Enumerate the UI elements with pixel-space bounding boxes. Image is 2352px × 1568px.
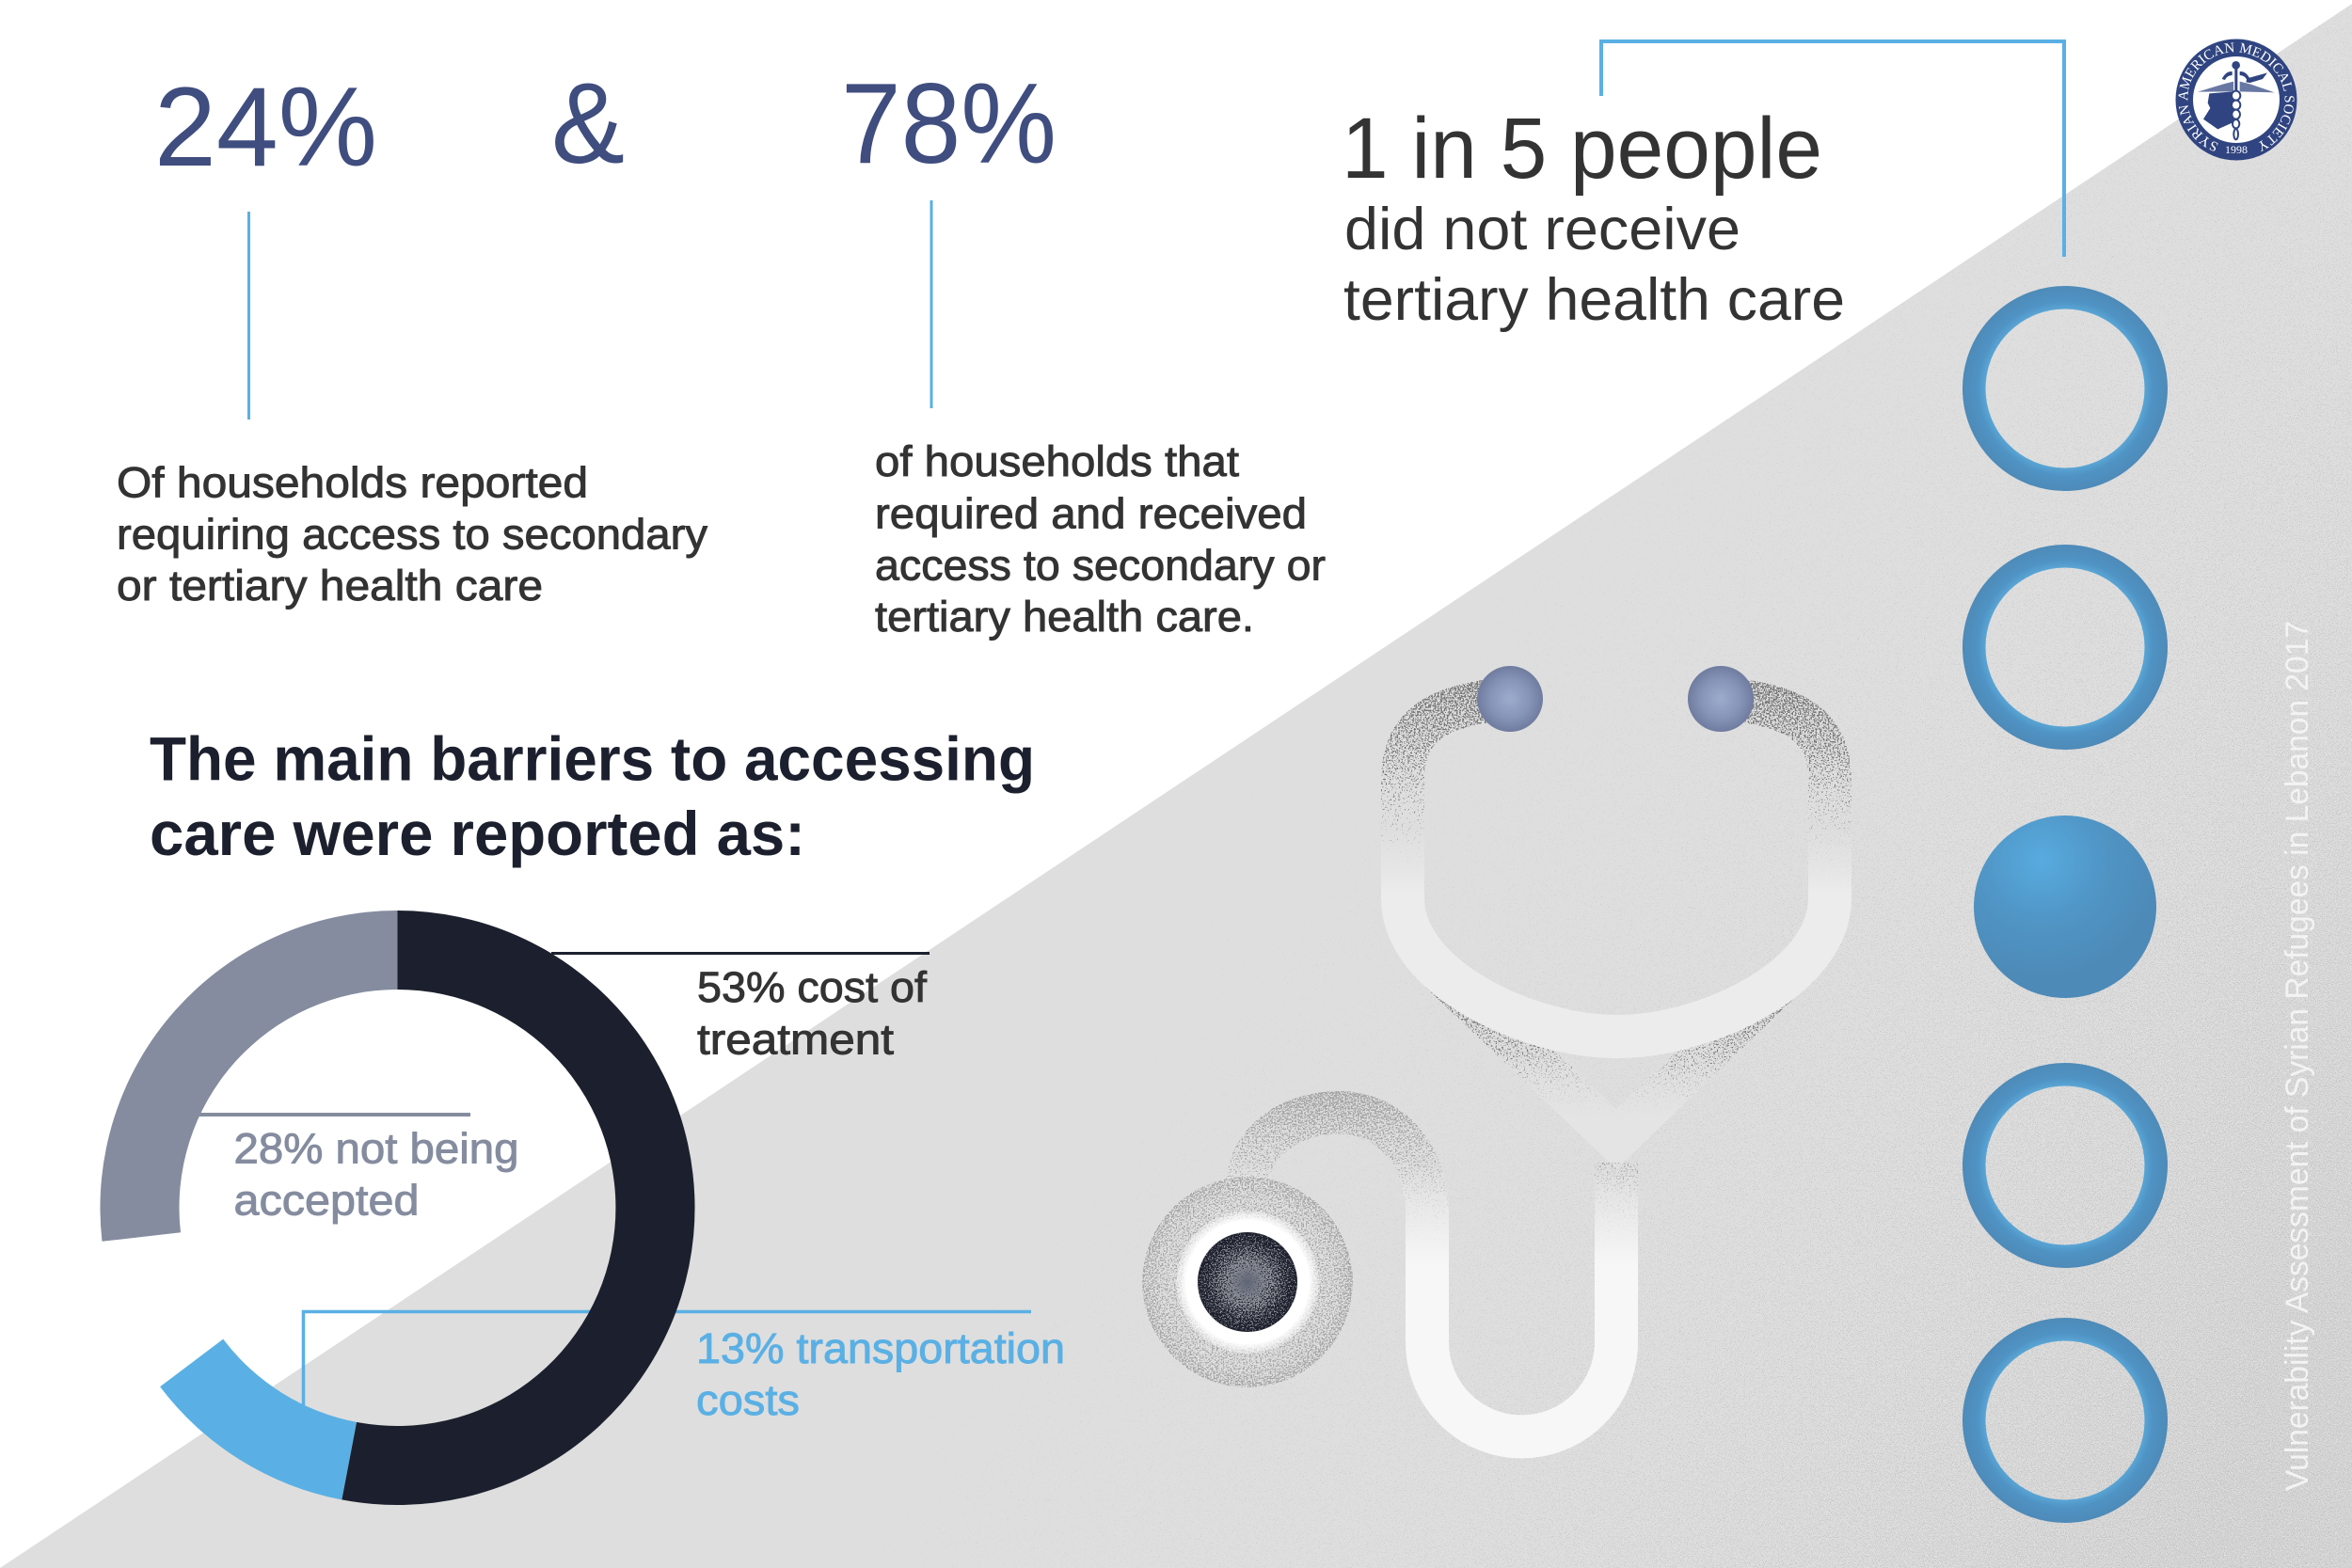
heading: main barriers — [150, 724, 1035, 868]
connector line under 78% — [930, 200, 933, 408]
main tube to chestpiece — [1248, 1113, 1616, 1436]
text block: 1 in 5 people — [1342, 101, 1845, 333]
ring 5 — [1974, 1329, 2156, 1512]
text block: 78% description: required and received — [875, 489, 1307, 538]
text block: 78% description: access to secondary or — [875, 542, 1326, 589]
text block: 78% description: of households that — [875, 437, 1240, 485]
text block: 1 in 5 people: tertiary health care — [1343, 267, 1845, 333]
text block: 24% description: requiring access to secondary — [117, 510, 708, 559]
ampersand: & — [551, 59, 625, 187]
label: 13% transportation costs: 13% transportation — [696, 1324, 1065, 1372]
label: 53% cost of treatment — [697, 963, 928, 1063]
heading: main barriers: care were reported as: — [150, 799, 805, 868]
stat: 24%: 24% — [154, 64, 377, 190]
donut chart — [100, 911, 695, 1505]
text block: 24% description — [117, 459, 708, 610]
label: 53% cost of treatment: 53% cost of — [697, 963, 928, 1011]
right earpiece — [1688, 666, 1754, 732]
text block: 24% description: or tertiary health care — [117, 562, 543, 610]
label: 13% transportation costs — [696, 1324, 1065, 1424]
filled circle — [1974, 816, 2156, 998]
left earpiece — [1477, 666, 1543, 732]
source note, vertical: Vulnerability Assessment of Syrian Refugees in Lebanon 2017 — [2280, 621, 2315, 1491]
label: 28% not being accepted — [233, 1125, 519, 1225]
Y branch of stethoscope — [1440, 972, 1782, 1139]
bracket connecting 1 in 5 text to circles — [1601, 41, 2064, 257]
ring 1 — [1974, 297, 2156, 480]
chestpiece — [1142, 1177, 1353, 1387]
leader line: 53% cost — [551, 952, 930, 955]
text block: 78% description — [875, 437, 1326, 641]
logo: Syrian American Medical Society seal: 1998 — [2225, 143, 2248, 156]
label: 53% cost of treatment: treatment — [697, 1016, 895, 1063]
stat: 78%: 78% — [841, 59, 1057, 187]
connector line under 24% — [247, 212, 250, 420]
icon: stethoscope — [1142, 666, 1830, 1436]
leader line: 28% not accepted — [199, 1113, 470, 1117]
text block: 78% description: tertiary health care. — [875, 593, 1254, 641]
ring 2 — [1974, 556, 2156, 738]
text block: 1 in 5 people: did not receive — [1344, 197, 1740, 262]
label: 13% transportation costs: costs — [696, 1376, 800, 1424]
label: 28% not being accepted: 28% not being — [233, 1125, 519, 1172]
leader line: 13% transportation — [303, 1311, 1031, 1408]
logo: Syrian American Medical Society seal: SYRIAN AMERICAN MEDICAL SOCIETY — [2179, 42, 2294, 152]
ring 4 — [1974, 1074, 2156, 1257]
heading: main barriers: The main barriers to accessing — [150, 724, 1035, 794]
segment: 28% not being accepted — [100, 911, 398, 1242]
segment: 53% cost of treatment — [342, 911, 695, 1505]
text block: 24% description: Of households reported — [117, 459, 588, 506]
text block: 1 in 5 people: 1 in 5 people — [1342, 101, 1822, 197]
icon: five people circles, one filled — [1974, 297, 2156, 1512]
segment: 13% transportation costs — [160, 1339, 357, 1499]
headset tubes — [1403, 698, 1830, 1037]
label: 28% not being accepted: accepted — [233, 1176, 420, 1225]
